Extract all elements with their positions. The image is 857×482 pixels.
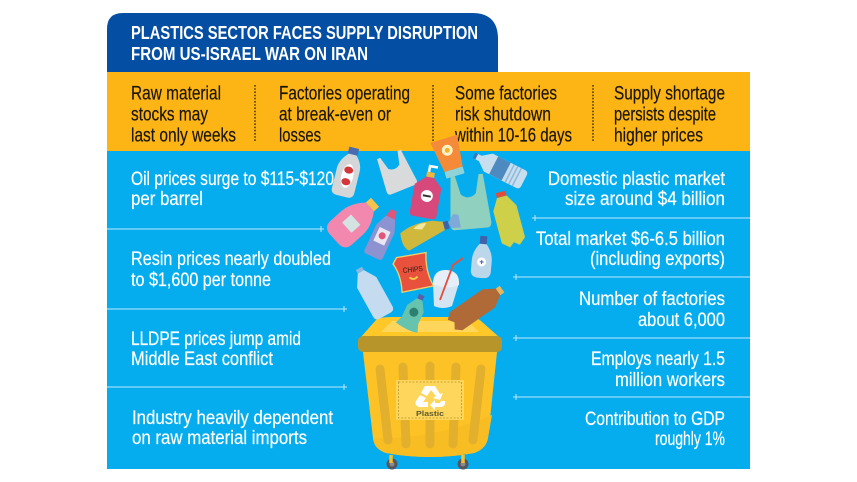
strip item: supply shortage: persists despite — [614, 104, 716, 126]
icon: water bottle — [470, 146, 528, 190]
icon: yellow-green bottle — [489, 189, 527, 249]
strip item: factories operating: losses — [279, 126, 321, 146]
icon: recycling symbol — [415, 386, 445, 410]
title: FROM US-ISRAEL WAR ON IRAN — [131, 43, 368, 64]
icon: mint plastic bag — [446, 173, 492, 231]
left item: LLDPE prices — [131, 329, 301, 370]
icon: cup with straw — [433, 258, 463, 308]
strip item: factories operating: Factories operating — [279, 84, 410, 104]
icon: clear plastic bottle — [349, 263, 395, 321]
left item: oil prices — [131, 169, 334, 210]
left item: LLDPE prices: LLDPE prices jump amid — [131, 329, 301, 350]
right item: GDP contribution: roughly 1% — [655, 429, 725, 450]
left item: resin prices: Resin prices nearly doubled — [131, 249, 331, 270]
strip item: raw material stocks — [131, 84, 236, 146]
left item: import dependence: on raw material imports — [132, 428, 307, 449]
icon: chips packet: CHIPS — [402, 264, 423, 275]
title: PLASTICS SECTOR FACES SUPPLY DISRUPTION — [131, 22, 478, 43]
icon: recycling bin — [358, 317, 502, 470]
icon: pink shampoo bottle — [323, 190, 386, 251]
icon: chips packet — [392, 252, 434, 293]
strip item: raw material stocks: stocks may — [131, 104, 208, 126]
icon: purple bottle — [363, 206, 403, 261]
right item: GDP contribution: Contribution to GDP — [585, 409, 725, 430]
icon: brown bottle — [445, 280, 508, 334]
right item: employment: Employs nearly 1.5 — [591, 349, 725, 370]
strip item: raw material stocks: Raw material — [131, 84, 221, 104]
right item: domestic market — [548, 169, 726, 210]
left item: resin prices — [131, 249, 331, 291]
left item: LLDPE prices: Middle East conflict — [131, 349, 274, 370]
left item: import dependence: Industry heavily dependent — [132, 408, 334, 429]
icon: teal toothpaste bottle — [395, 290, 433, 334]
panel: orange strip — [107, 72, 750, 151]
strip item: supply shortage: higher prices — [614, 126, 703, 146]
left item: import dependence — [132, 408, 334, 449]
icon: gray lotion bottle — [331, 145, 365, 199]
right item: number of factories — [579, 289, 725, 331]
right item: domestic market: Domestic plastic market — [548, 169, 726, 190]
strip item: factories risk shutdown: risk shutdown — [455, 104, 551, 126]
strip item: supply shortage — [614, 84, 725, 146]
icon: orange tube — [430, 135, 469, 180]
panel: main blue background — [107, 151, 750, 469]
right item: total market: Total market $6-6.5 billion — [536, 229, 725, 250]
left item: oil prices: per barrel — [131, 189, 203, 210]
strip item: factories operating — [279, 84, 410, 146]
title — [131, 22, 478, 64]
bin label: Plastic — [416, 409, 444, 418]
strip item: factories risk shutdown — [454, 84, 572, 146]
right item: total market — [536, 229, 725, 270]
strip item: factories risk shutdown: within 10-16 days — [454, 126, 572, 146]
left item: resin prices: to $1,600 per tonne — [131, 270, 271, 291]
icon: pink soap dispenser — [409, 164, 445, 220]
right item: employment: million workers — [615, 370, 725, 391]
right item: GDP contribution — [585, 409, 725, 450]
strip item: factories operating: at break-even or — [279, 104, 392, 126]
strip item: raw material stocks: last only weeks — [131, 126, 236, 146]
left item: oil prices: Oil prices surge to $115-$120 — [131, 169, 334, 190]
right item: total market: (including exports) — [590, 249, 725, 270]
strip item: supply shortage: Supply shortage — [614, 84, 725, 104]
right item: domestic market: size around $4 billion — [565, 189, 725, 210]
icon: small blue bottle — [470, 235, 494, 279]
right item: number of factories: Number of factories — [579, 289, 725, 310]
icon: gray plastic bag — [374, 148, 418, 196]
icon: yellow spray bottle — [398, 213, 464, 252]
strip item: factories risk shutdown: Some factories — [455, 84, 557, 104]
right item: number of factories: about 6,000 — [638, 310, 725, 331]
right item: employment — [591, 349, 725, 391]
title banner — [107, 13, 498, 72]
